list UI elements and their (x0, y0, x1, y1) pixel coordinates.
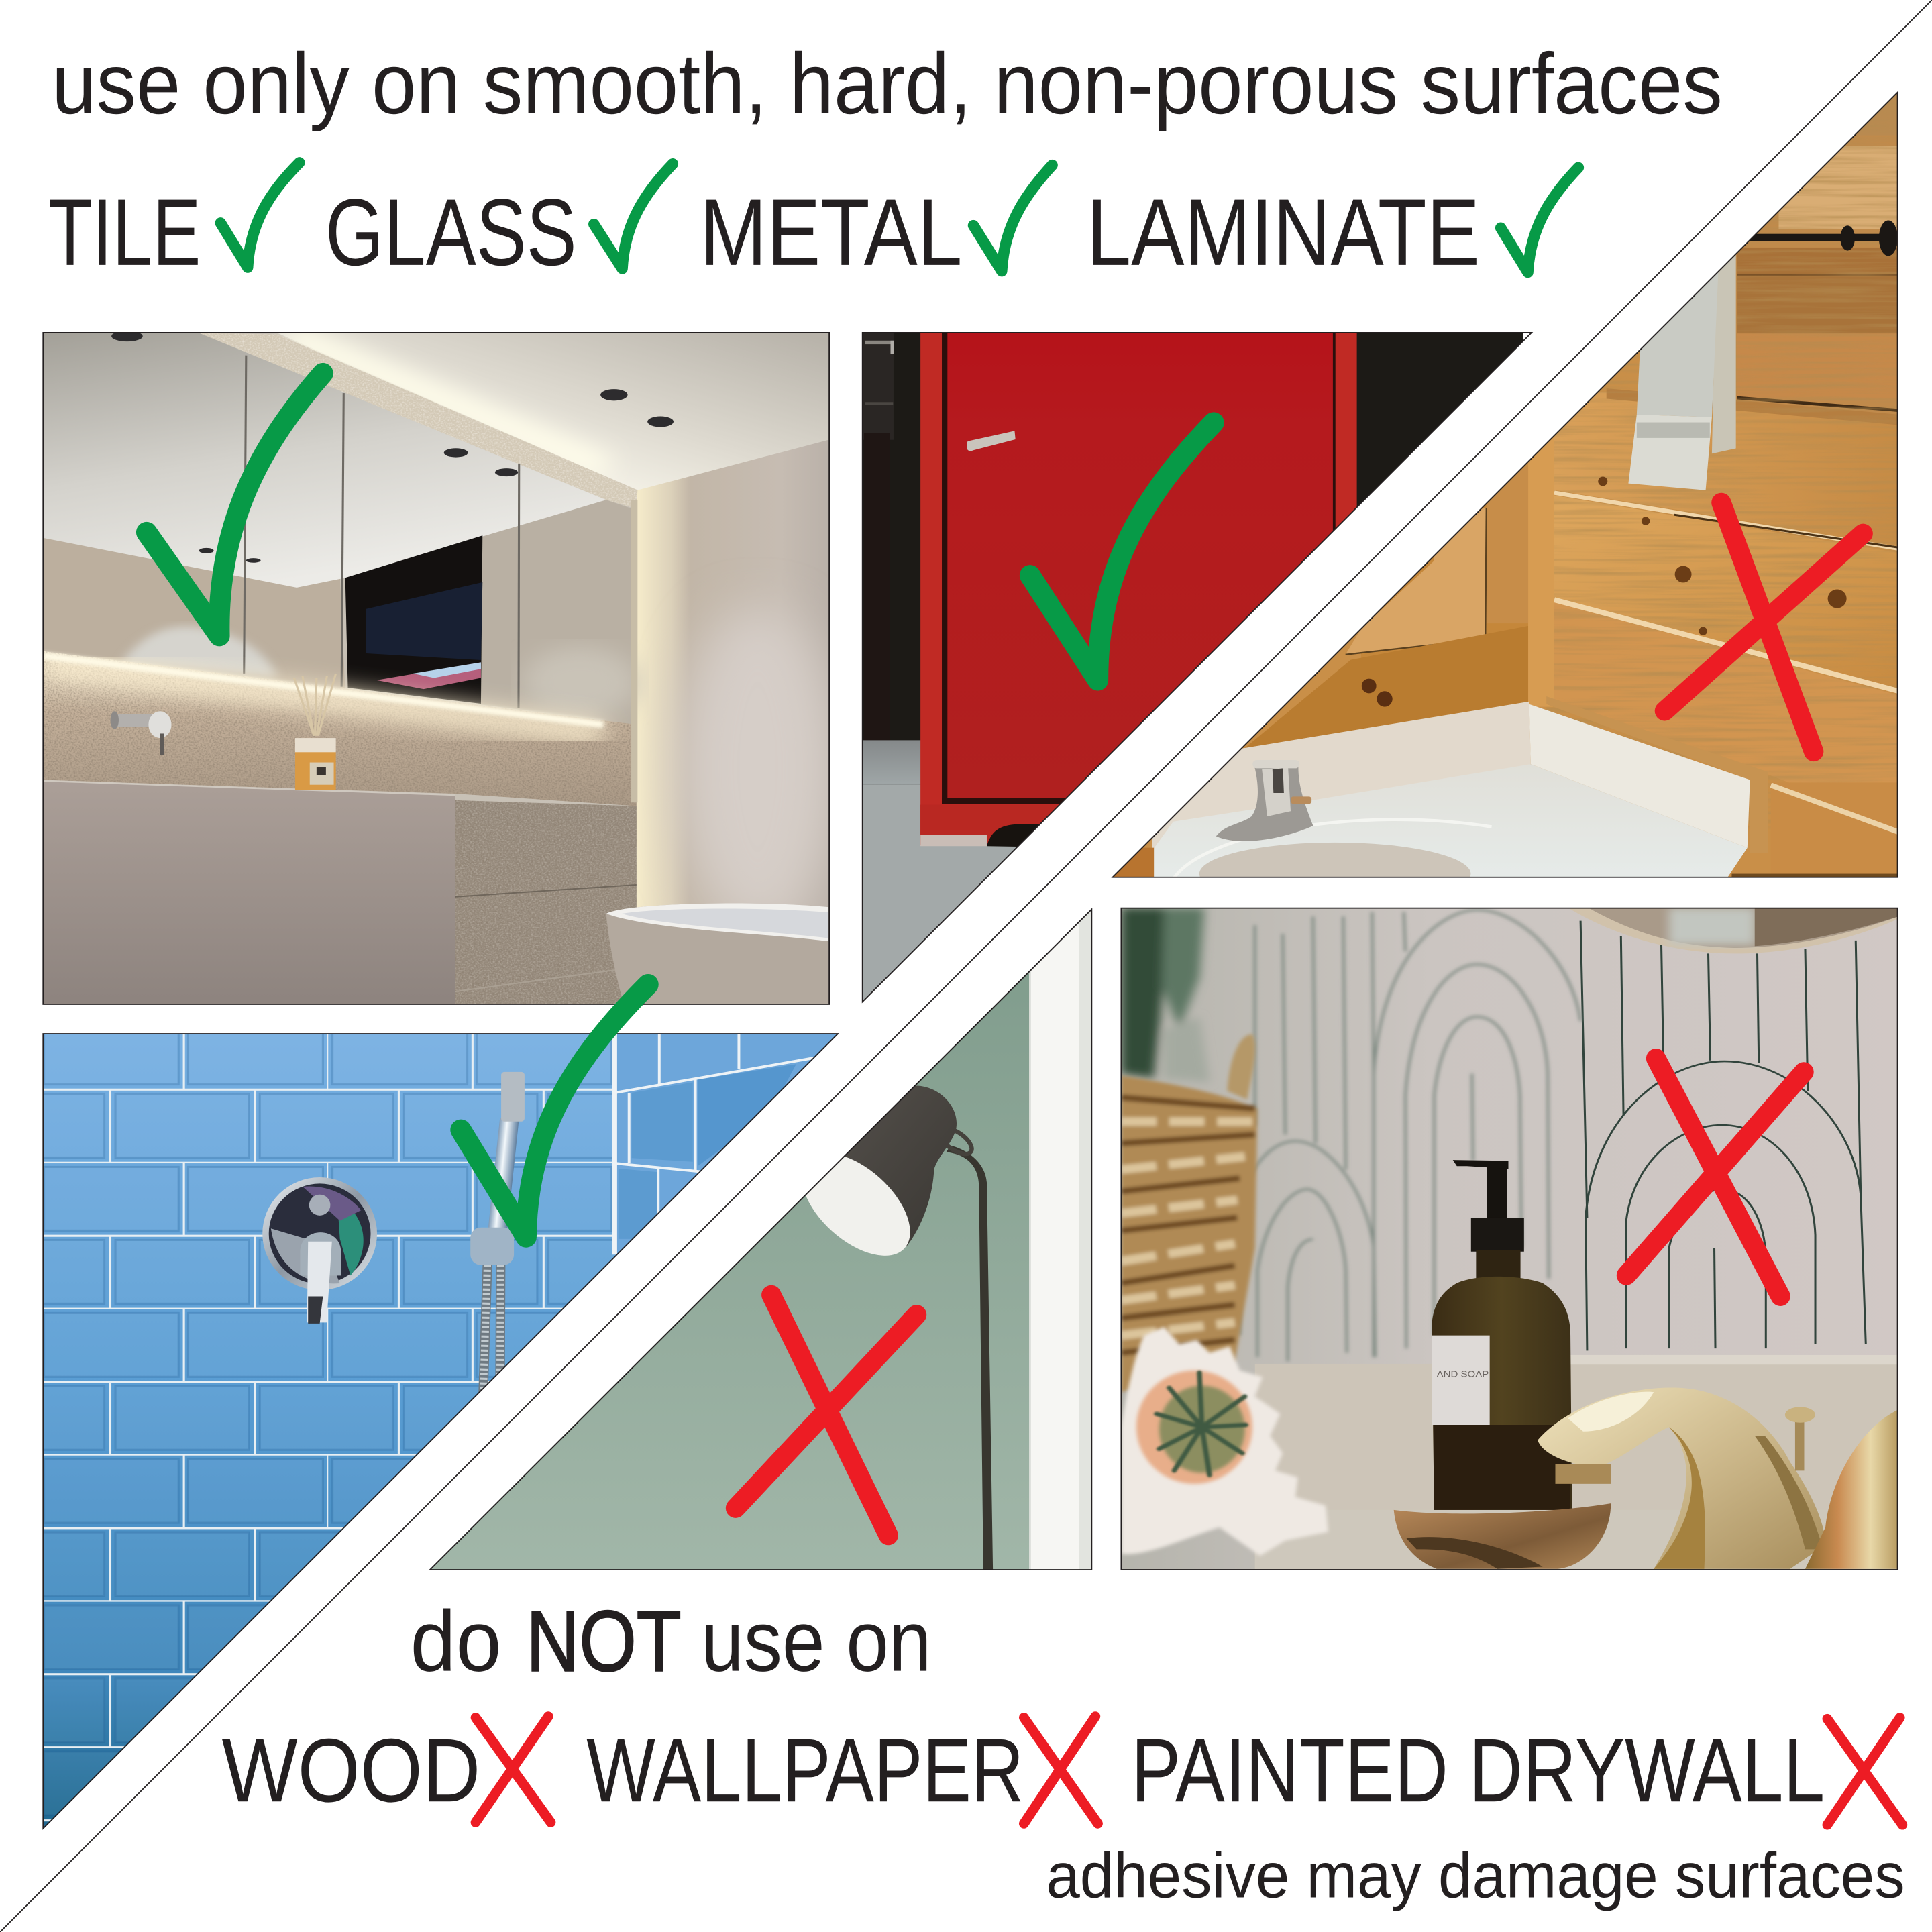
label: metal: METAL (700, 179, 962, 285)
panel: knotty pine wood bathroom (1100, 80, 1919, 905)
mirror edge (1568, 908, 1898, 953)
hanging towel (1628, 248, 1736, 490)
vanity counter (42, 780, 455, 1007)
plank row 1 (1554, 388, 1898, 545)
label: tile: TILE (48, 179, 201, 285)
brass faucet (1538, 1387, 1898, 1569)
label: glass: GLASS (325, 179, 577, 285)
door (947, 333, 1334, 800)
icon: metal check (973, 165, 1053, 271)
ceiling (278, 333, 828, 490)
mirror ceiling (42, 333, 606, 588)
window blind reflection (345, 535, 482, 704)
wall valve (262, 1177, 377, 1324)
caption: adhesive warning: adhesive may damage surfaces (1046, 1841, 1905, 1912)
plank edges (1554, 493, 1898, 691)
wooden bowl (1394, 1503, 1611, 1569)
left wall and mirror (1241, 467, 1528, 751)
lower stone (455, 800, 637, 1034)
icon: large check on fridge (1030, 423, 1214, 680)
icon: large check on blue tile (461, 985, 648, 1237)
wall light pool (680, 606, 836, 927)
icon: glass check (594, 164, 673, 268)
plank row 3 (1546, 602, 1898, 824)
reed diffuser (294, 674, 336, 790)
panel: painted green wall with lamp (416, 899, 1100, 1583)
icon: wood cross (476, 1717, 551, 1823)
amber soap bottle (1432, 1160, 1572, 1510)
icon: red cross on wallpaper (1626, 1059, 1804, 1296)
panel: wallpaper vanity (1114, 899, 1905, 1583)
countertop (1255, 1355, 1898, 1573)
wall faucet (111, 711, 172, 755)
wood knots (1598, 476, 1847, 635)
left shelf (863, 333, 894, 740)
icon: red cross on painted wall (736, 1295, 917, 1536)
stone band (199, 333, 637, 509)
heading: do NOT use on: NOT (526, 1594, 682, 1690)
corner tile patch (614, 1034, 844, 1271)
bathtub (606, 904, 828, 1016)
icon: laminate check (1501, 168, 1578, 272)
amber soap bottle: AND SOAP (1437, 1368, 1489, 1379)
icon: tile check (221, 162, 299, 268)
under-mirror LED glow (42, 665, 604, 733)
ceiling lights (111, 331, 674, 563)
panel: blue subway tile (27, 1020, 859, 1838)
side stone trim (631, 500, 637, 802)
shower rail (470, 1072, 525, 1395)
heading: do NOT use on: do (411, 1594, 502, 1690)
marble backsplash and vanity (1113, 696, 1898, 905)
label: laminate: LAMINATE (1087, 179, 1480, 285)
heading: do NOT use on (411, 1594, 932, 1690)
upper wall planks (1701, 91, 1898, 415)
seashell with air plant (1121, 1327, 1328, 1556)
icon: large check on tile bathroom (147, 374, 323, 636)
corner post (1528, 435, 1554, 707)
heading: use only on smooth surfaces: use only on smooth, hard, non-porous surfaces (52, 36, 1723, 132)
stone backsplash (42, 651, 637, 806)
woven basket (1121, 1034, 1258, 1392)
wallpaper arches sharp (1580, 921, 1866, 1350)
mirror door seams (244, 356, 519, 708)
floor lamp (784, 1086, 993, 1571)
heading: do NOT use on: use on (701, 1594, 932, 1690)
plank row 2 (1554, 495, 1898, 688)
icon: red cross on wood (1664, 502, 1863, 751)
panel: red metal fridge (852, 322, 1532, 1052)
door handle (967, 431, 1016, 451)
wood grain overlay (1546, 91, 1898, 832)
mirror walls (42, 538, 345, 691)
fridge foot (920, 835, 987, 846)
approved surfaces list (48, 162, 1578, 285)
white door trim (1029, 899, 1092, 1583)
icon: drywall cross (1827, 1717, 1902, 1825)
fridge body (920, 333, 1357, 847)
towel rod (1748, 220, 1898, 256)
wallpaper arches soft (1240, 910, 1580, 1362)
icon: wallpaper cross (1024, 1717, 1098, 1823)
rejected surfaces list (222, 1717, 1902, 1825)
chrome faucet (1216, 760, 1313, 841)
label: wallpaper: WALLPAPER (586, 1721, 1024, 1821)
light band glow (288, 335, 606, 469)
tile grid (27, 1020, 614, 1838)
right wall (637, 440, 828, 907)
panel: tiled bathroom with mirror (27, 322, 845, 1034)
green plant (1121, 908, 1210, 1082)
bottle label (1432, 1336, 1490, 1425)
mirror reflected light (121, 627, 278, 678)
label: wood: WOOD (222, 1721, 480, 1821)
concrete floor (863, 740, 1291, 785)
